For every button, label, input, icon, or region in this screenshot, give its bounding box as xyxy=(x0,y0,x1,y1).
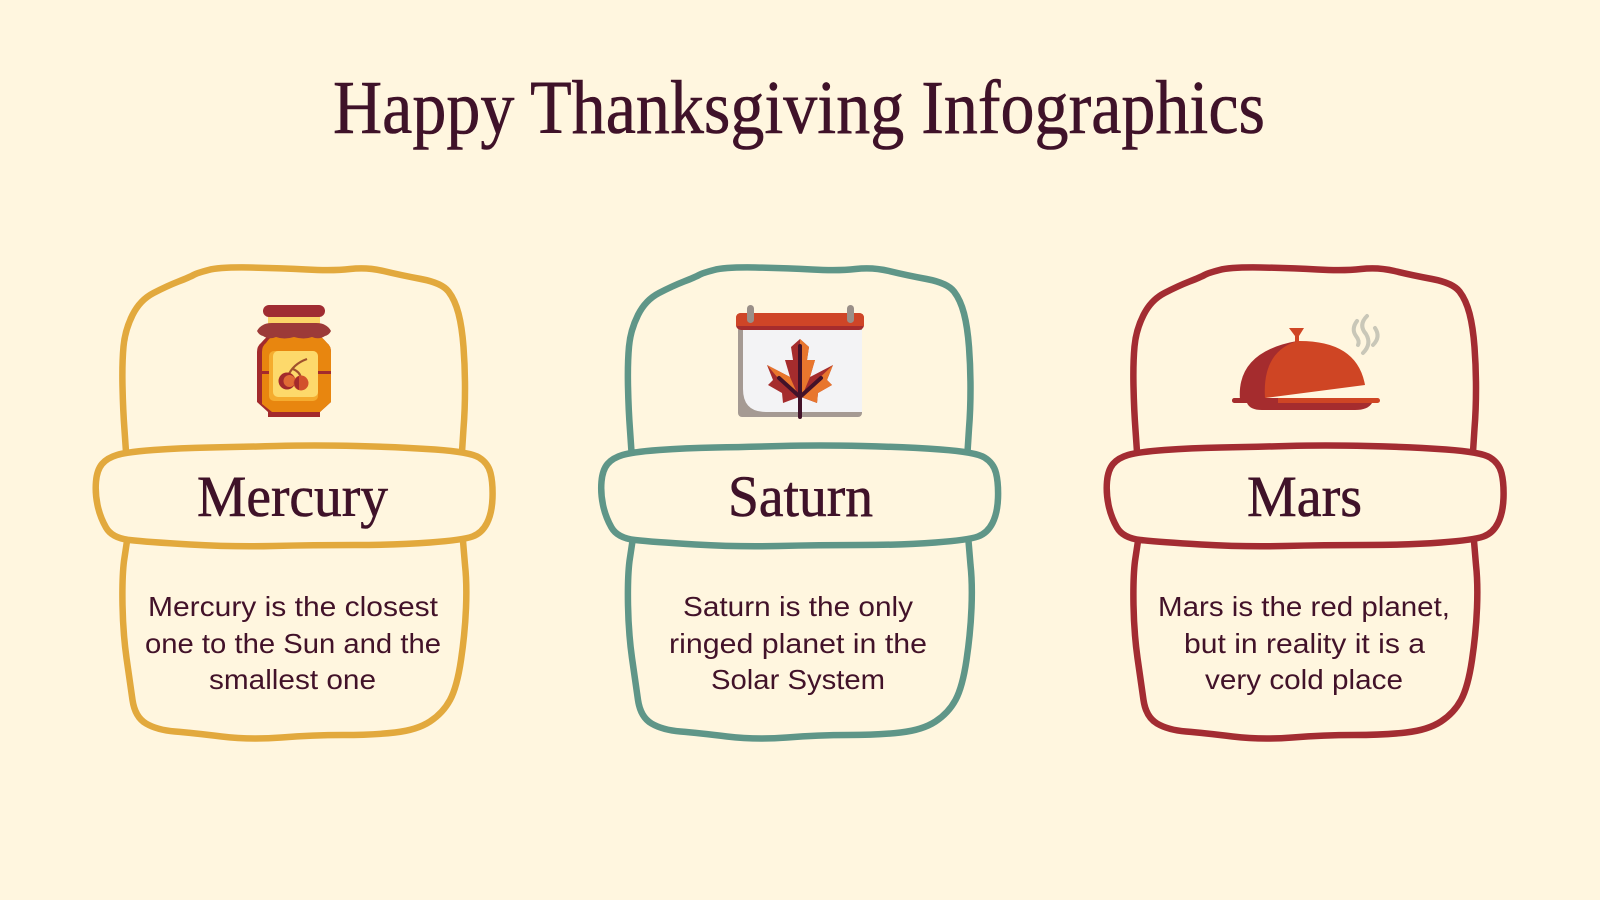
text: Saturn description: ringed planet in the xyxy=(669,628,927,659)
text: Mars description: Mars is the red planet, xyxy=(1158,591,1450,622)
card outline: Mars xyxy=(1107,267,1504,739)
panel: Saturn xyxy=(601,267,998,739)
icon: jam jar xyxy=(257,305,331,417)
text: Mars description: very cold place xyxy=(1205,664,1403,695)
text: Mercury description: one to the Sun and the xyxy=(145,628,441,659)
panel: Mars xyxy=(1107,267,1504,739)
panel: Mercury xyxy=(96,267,493,739)
text: Mercury description: Mercury is the closest xyxy=(148,591,438,622)
icon: calendar with maple leaf xyxy=(736,305,864,417)
heading: Mercury: Mercury xyxy=(197,464,388,529)
text: Mars description xyxy=(1158,591,1450,695)
heading: Saturn: Saturn xyxy=(728,464,873,529)
card outline: Saturn xyxy=(601,267,998,739)
title: Happy Thanksgiving Infographics xyxy=(333,66,1265,150)
text: Saturn description xyxy=(669,591,927,695)
text: Saturn description: Solar System xyxy=(711,664,885,695)
text: Mercury description xyxy=(145,591,441,695)
icon: serving cloche with steam xyxy=(1232,316,1380,410)
text: Mercury description: smallest one xyxy=(209,664,376,695)
text: Mars description: but in reality it is a xyxy=(1184,628,1425,659)
card outline: Mercury xyxy=(96,267,493,739)
text: Saturn description: Saturn is the only xyxy=(683,591,913,622)
heading: Mars: Mars xyxy=(1247,464,1362,529)
